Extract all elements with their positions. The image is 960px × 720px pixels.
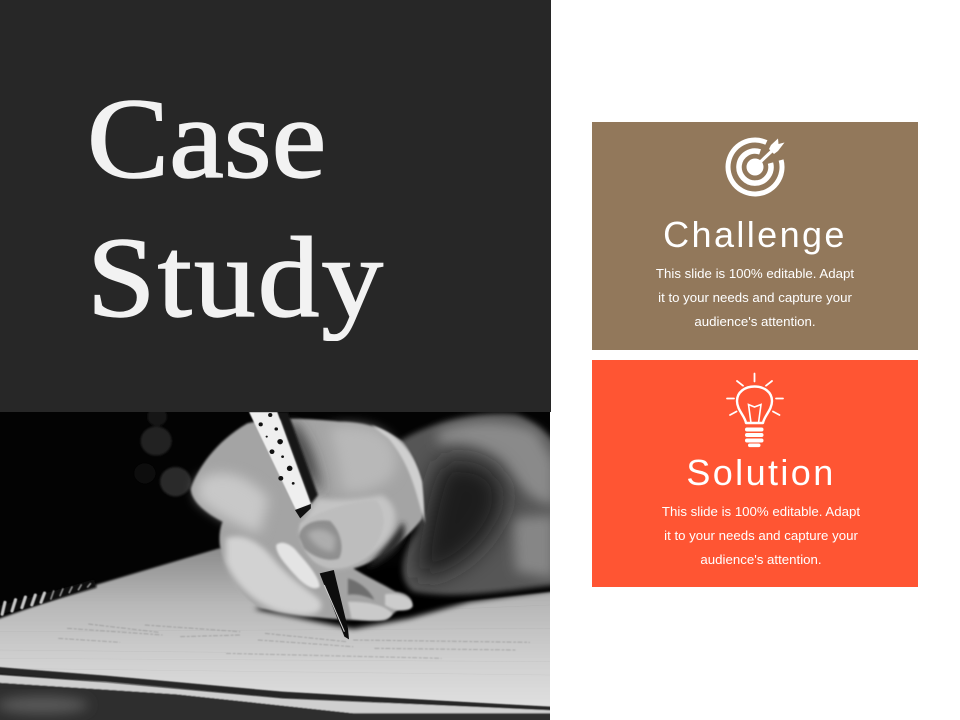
handwriting lines	[58, 624, 530, 658]
text: solution description	[662, 504, 860, 567]
text: solution description: it to your needs and capture your	[664, 528, 858, 543]
text: challenge description: This slide is 100% editable. Adapt	[656, 266, 854, 281]
title: Case: Case	[87, 75, 326, 202]
pen barrel	[249, 412, 318, 518]
icon: light bulb	[726, 372, 784, 448]
icon: target with arrow	[726, 138, 784, 196]
thumb with nail	[299, 500, 384, 567]
panel: title background	[0, 0, 551, 412]
heading: Solution: Solution	[686, 452, 836, 493]
text: challenge description: it to your needs and capture your	[658, 290, 852, 305]
panel: solution	[592, 360, 918, 587]
text: solution description: This slide is 100% editable. Adapt	[662, 504, 860, 519]
photo: hand writing in a spiral notebook	[0, 412, 550, 720]
fingernail	[276, 543, 320, 588]
text: challenge description: audience's attention.	[694, 314, 816, 329]
shadow under hand	[254, 565, 565, 629]
heading: Challenge: Challenge	[663, 214, 847, 255]
sweater sleeve	[399, 414, 565, 595]
bokeh lights	[134, 407, 191, 496]
panel: challenge	[592, 122, 918, 350]
spiral binding	[0, 583, 95, 614]
title: Study: Study	[87, 214, 385, 341]
notebook page	[0, 548, 565, 708]
pen tip	[320, 570, 349, 639]
hand	[191, 419, 425, 620]
text: challenge description	[656, 266, 854, 329]
text: solution description: audience's attention.	[700, 552, 822, 567]
grid lines	[0, 605, 550, 675]
lower notebook edge	[0, 667, 565, 720]
